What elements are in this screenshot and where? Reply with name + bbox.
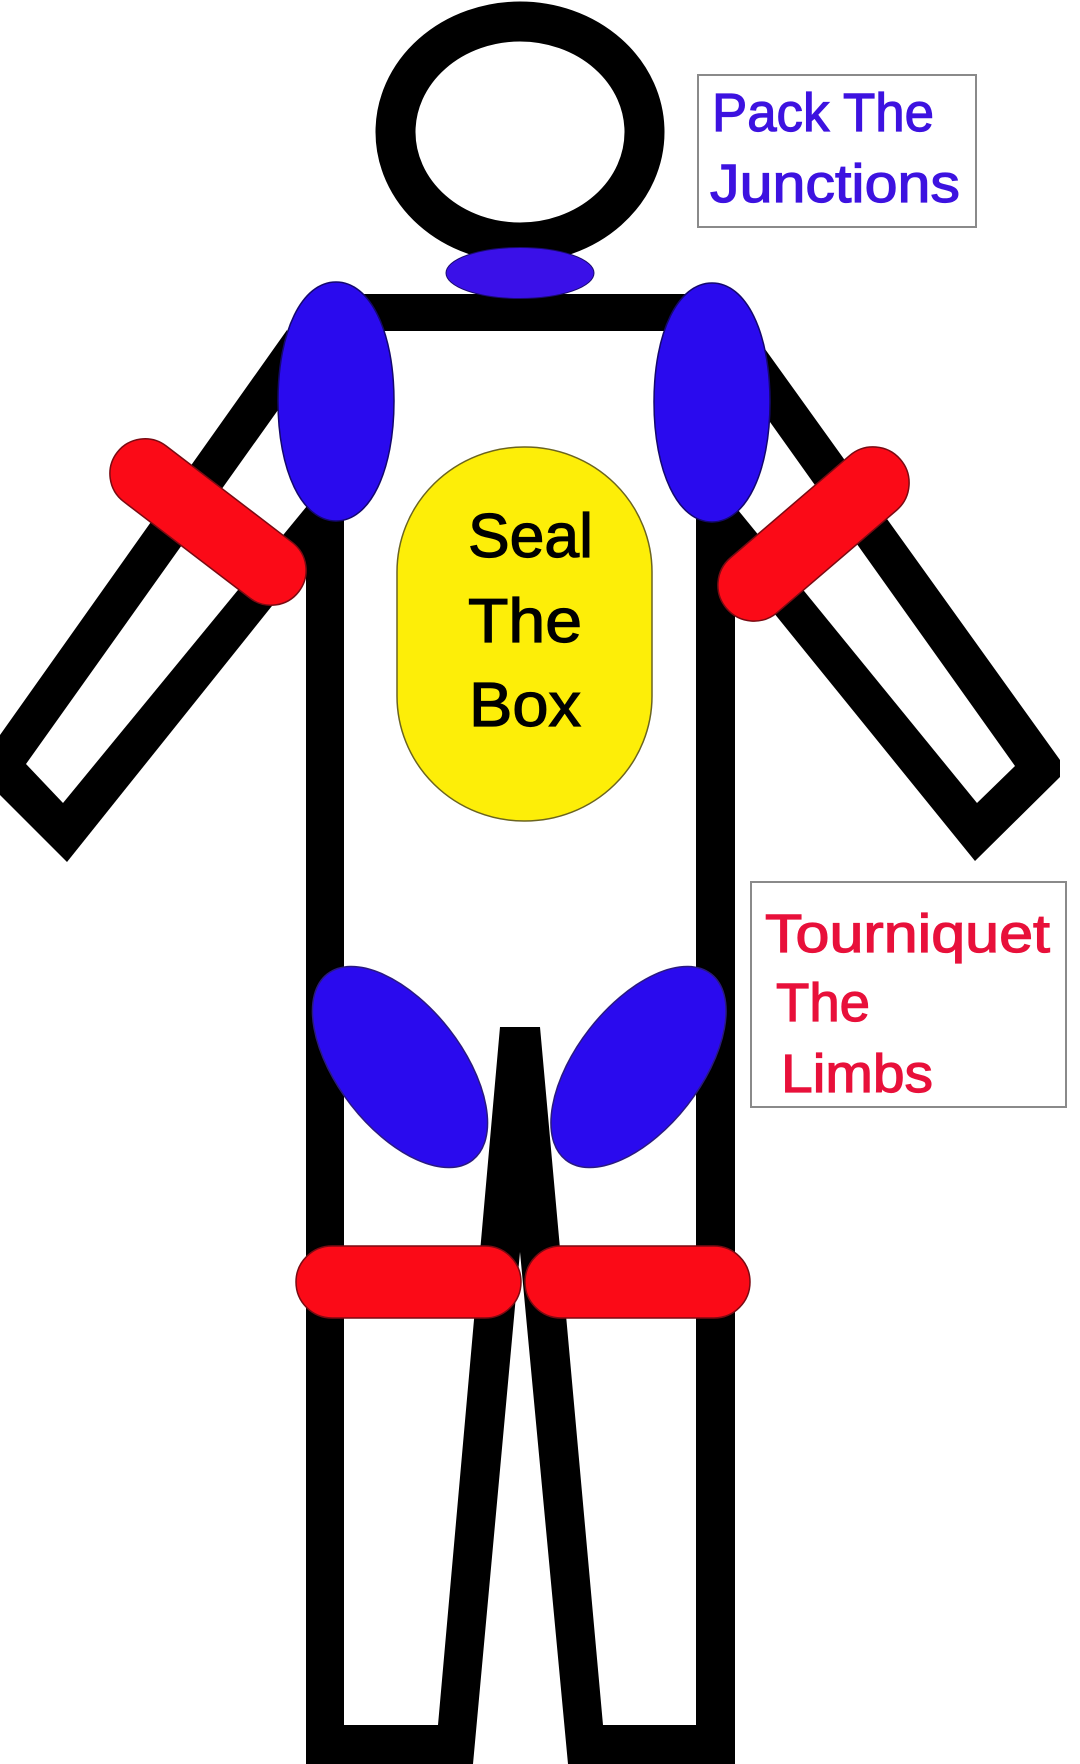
shoulder bar (336, 294, 712, 331)
left groin junction pack (278, 936, 522, 1198)
right arm tourniquet (703, 432, 924, 636)
callout: tourniquet the limbs (751, 882, 1066, 1107)
right arm (725, 349, 1060, 861)
callout: tourniquet the limbs: Tourniquet (765, 904, 1050, 964)
left arm tourniquet (96, 425, 320, 619)
right groin junction pack (517, 936, 760, 1198)
callout: tourniquet the limbs: The (776, 973, 870, 1033)
left shoulder junction pack (278, 282, 394, 521)
left torso and leg side (306, 480, 344, 1764)
callout: pack the junctions (698, 75, 976, 227)
right torso and leg side (696, 480, 735, 1764)
chest seal with label: Box (469, 671, 581, 740)
callout: pack the junctions: Junctions (710, 154, 960, 214)
neck junction pack (446, 248, 594, 298)
inner legs and feet (306, 1027, 735, 1764)
right shoulder junction pack (654, 283, 770, 522)
callout: pack the junctions: Pack The (712, 83, 934, 143)
chest seal with label: Seal (468, 502, 593, 571)
chest seal with label: The (468, 587, 582, 656)
chest seal with label (397, 447, 652, 821)
left arm (0, 330, 320, 862)
head (396, 22, 644, 242)
callout: tourniquet the limbs: Limbs (781, 1044, 933, 1104)
right thigh tourniquet (525, 1246, 750, 1318)
left thigh tourniquet (296, 1246, 521, 1318)
